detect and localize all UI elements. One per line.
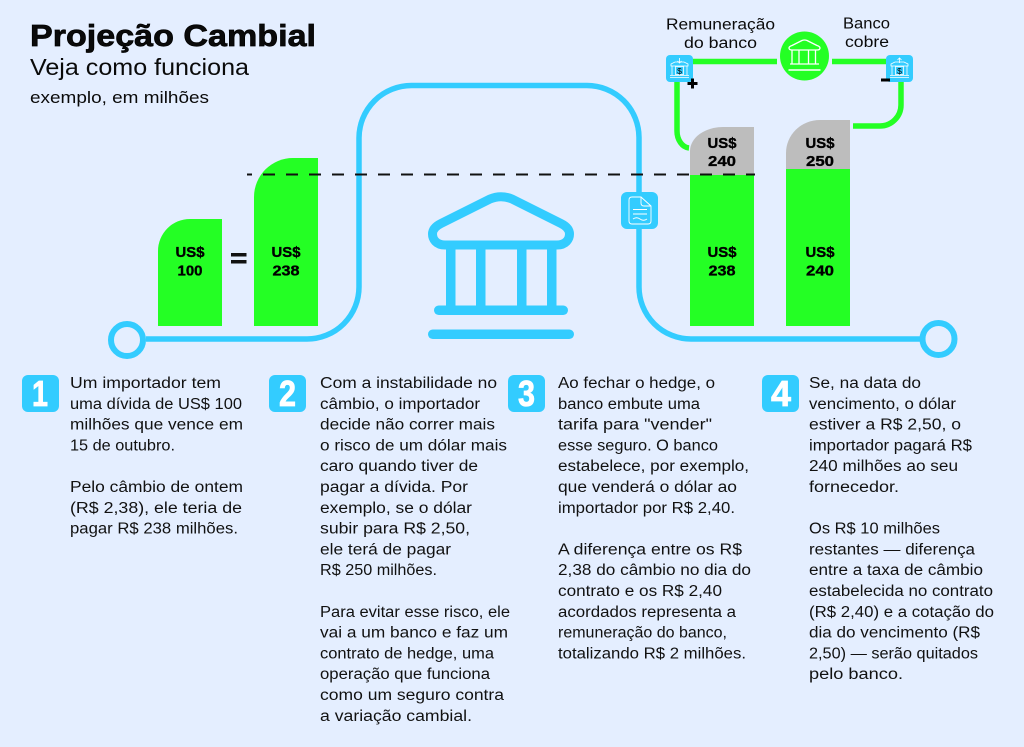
step 2 text: câmbio, o importador xyxy=(320,396,480,413)
step 3 text: 2,38 do câmbio no dia do xyxy=(558,562,751,579)
step 3 text: estabelece, por exemplo, xyxy=(558,458,749,475)
step 1 text: pagar R$ 238 milhões. xyxy=(70,521,238,538)
step 4 text xyxy=(809,375,994,683)
step 1 text xyxy=(70,375,243,538)
step 3 text xyxy=(558,375,751,662)
bar: US$ 250 with grey top: 250 xyxy=(806,153,834,170)
step 2 text: como um seguro contra xyxy=(320,687,504,704)
bar: US$ 238: 238 xyxy=(272,262,300,280)
step 2 text: caro quando tiver de xyxy=(320,458,478,475)
step 1 text: milhões que vence em xyxy=(70,417,243,434)
bar: US$ 240 with grey top xyxy=(690,127,754,326)
step 4 text: Se, na data do xyxy=(809,375,921,392)
step 4 text: estabelecida no contrato xyxy=(809,583,993,600)
step 2 text: Para evitar esse risco, ele xyxy=(320,604,510,621)
subtitle: Veja como funciona xyxy=(30,54,249,80)
icon: bank receives: $ xyxy=(677,66,682,76)
step 4 text: Os R$ 10 milhões xyxy=(809,521,940,538)
equals sign xyxy=(231,253,246,264)
bar: US$ 240 with grey top: 238 xyxy=(708,262,736,280)
unit note: exemplo, em milhões xyxy=(30,89,209,107)
bar: US$ 250 with grey top xyxy=(786,120,850,326)
step 3 text: tarifa para "vender" xyxy=(558,417,712,434)
label: bank charges xyxy=(843,16,890,51)
central bank icon xyxy=(428,197,574,339)
step 2 number badge: 2 xyxy=(279,373,296,414)
label: bank charges: Banco xyxy=(843,16,890,32)
label: bank charges: cobre xyxy=(845,34,889,51)
bar: US$ 238: US$ xyxy=(272,244,301,261)
bar: US$ 250 with grey top: US$ xyxy=(806,135,835,152)
step 3 text: banco embute uma xyxy=(558,396,700,413)
icon: bank receives xyxy=(666,55,693,82)
step 2 text: vai a um banco e faz um xyxy=(320,625,508,642)
bar: US$ 250 with grey top: US$ xyxy=(806,244,835,261)
step 4 text: fornecedor. xyxy=(809,479,899,496)
step 3 number badge xyxy=(508,373,545,414)
bar: US$ 240 with grey top: 240 xyxy=(708,153,736,170)
step 2 text xyxy=(320,375,510,725)
plus sign xyxy=(688,78,698,88)
step 2 text: subir para R$ 2,50, xyxy=(320,521,470,538)
step 4 text: pelo banco. xyxy=(809,666,903,683)
step 3 text: acordados representa a xyxy=(558,604,736,621)
step 2 text: contrato de hedge, uma xyxy=(320,645,494,662)
step 3 text: A diferença entre os R$ xyxy=(558,541,742,558)
step 3 text: remuneração do banco, xyxy=(558,625,727,642)
step 3 text: importador por R$ 2,40. xyxy=(558,500,735,517)
title: Projeção Cambial xyxy=(30,18,316,53)
step 3 text: esse seguro. O banco xyxy=(558,437,718,454)
bar: US$ 100: 100 xyxy=(178,262,202,280)
minus sign xyxy=(881,78,890,82)
icon: green bank circle xyxy=(780,32,829,80)
step 4 text: 240 milhões ao seu xyxy=(809,458,958,475)
step 2 text: Com a instabilidade no xyxy=(320,375,497,392)
icon: contract document xyxy=(621,192,658,229)
step 1 text: Pelo câmbio de ontem xyxy=(70,479,243,496)
step 1 text: Um importador tem xyxy=(70,375,221,392)
step 3 text: que venderá o dólar ao xyxy=(558,479,737,496)
step 3 text: Ao fechar o hedge, o xyxy=(558,375,715,392)
step 4 number badge: 4 xyxy=(771,373,791,414)
step 1 text: (R$ 2,38), ele teria de xyxy=(70,500,242,517)
step 2 text: R$ 250 milhões. xyxy=(320,562,437,579)
bar: US$ 250 with grey top: 240 xyxy=(806,262,834,280)
step 1 number badge xyxy=(22,373,59,414)
step 4 text: entre a taxa de câmbio xyxy=(809,562,983,579)
bar: US$ 100 xyxy=(158,219,222,326)
step 2 text: o risco de um dólar mais xyxy=(320,437,507,454)
step 3 text: contrato e os R$ 2,40 xyxy=(558,583,722,600)
step 4 text: estiver a R$ 2,50, o xyxy=(809,417,961,434)
step 1 text: uma dívida de US$ 100 xyxy=(70,396,242,413)
step 2 text: decide não correr mais xyxy=(320,417,495,434)
step 2 text: exemplo, se o dólar xyxy=(320,500,472,517)
label: bank remuneration: Remuneração xyxy=(666,16,775,34)
bar: US$ 100: US$ xyxy=(176,244,205,261)
step 2 text: ele terá de pagar xyxy=(320,541,451,558)
step 4 number badge xyxy=(762,373,799,414)
step 4 text: restantes — diferença xyxy=(809,541,975,558)
label: bank remuneration: do banco xyxy=(684,35,757,52)
step 3 text: totalizando R$ 2 milhões. xyxy=(558,645,746,662)
step 1 text: 15 de outubro. xyxy=(70,437,175,454)
bar: US$ 240 with grey top: US$ xyxy=(708,244,737,261)
dashed exchange-rate line xyxy=(247,174,755,176)
step 4 text: importador pagará R$ xyxy=(809,437,972,454)
icon: bank pays: $ xyxy=(897,66,902,76)
step 2 text: a variação cambial. xyxy=(320,708,472,725)
bar: US$ 238 xyxy=(254,158,318,326)
blue flow line with start and end circles xyxy=(111,86,954,356)
step 2 text: pagar a dívida. Por xyxy=(320,479,468,496)
step 3 number badge: 3 xyxy=(518,373,535,414)
step 1 number badge: 1 xyxy=(32,373,48,414)
green bank connector lines xyxy=(677,62,901,148)
step 2 number badge xyxy=(269,373,306,414)
icon: bank pays xyxy=(886,55,913,82)
step 4 text: (R$ 2,40) e a cotação do xyxy=(809,604,994,621)
label: bank remuneration xyxy=(666,16,775,52)
step 2 text: operação que funciona xyxy=(320,666,490,683)
step 4 text: dia do vencimento (R$ xyxy=(809,625,980,642)
step 4 text: 2,50) — serão quitados xyxy=(809,645,978,662)
bar: US$ 240 with grey top: US$ xyxy=(708,135,737,152)
step 4 text: vencimento, o dólar xyxy=(809,396,956,413)
